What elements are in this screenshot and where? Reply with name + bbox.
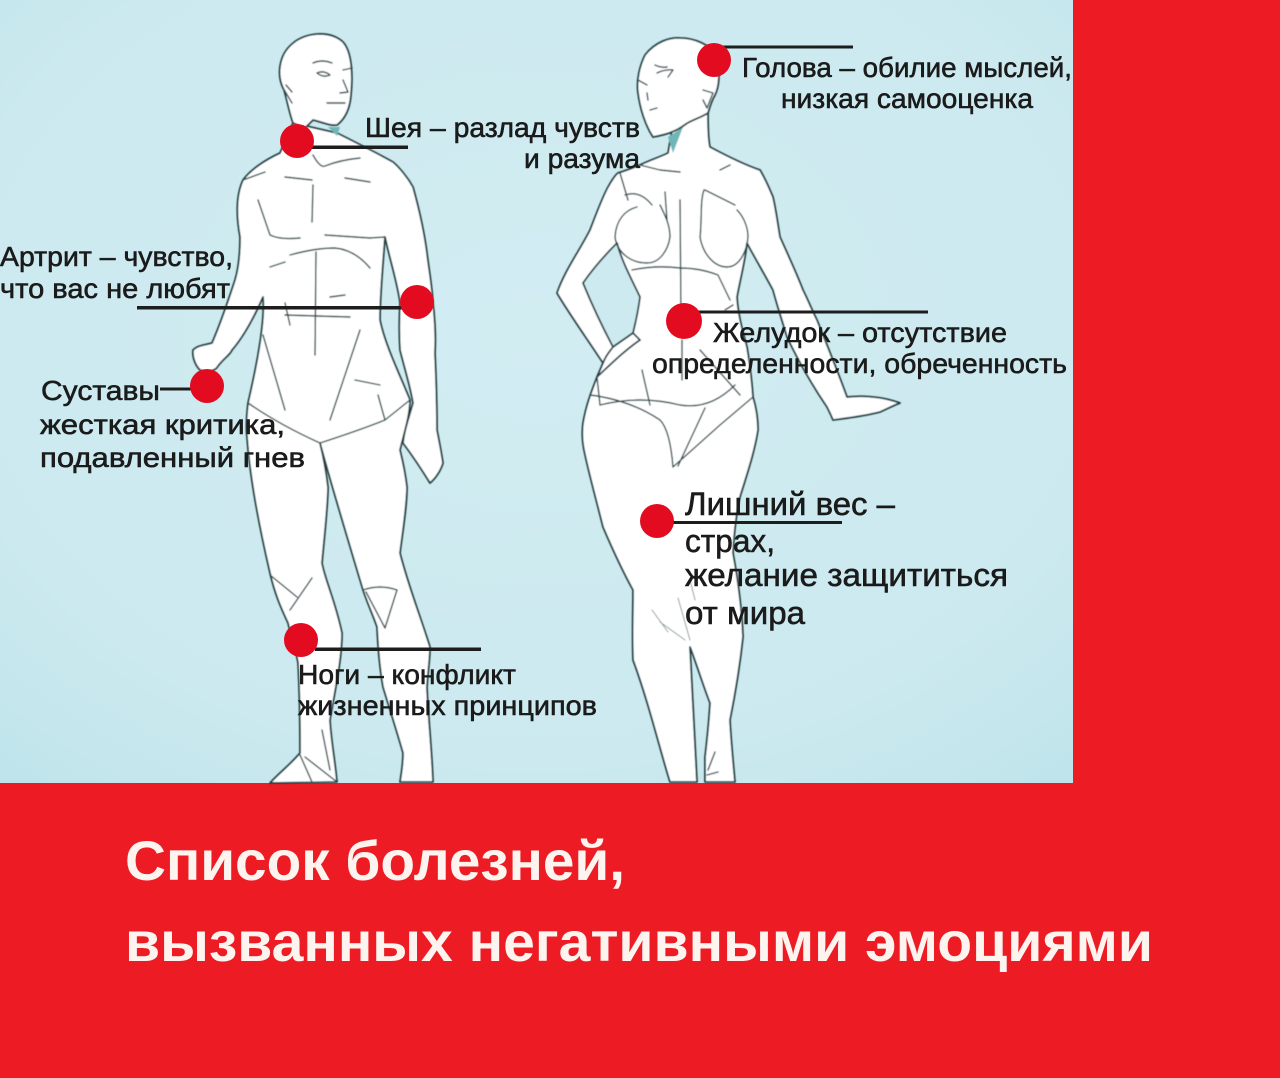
female arm gap xyxy=(583,243,640,347)
marker: head xyxy=(697,43,731,77)
text: head: Голова – обилие мыслей, xyxy=(742,52,1072,83)
marker: neck xyxy=(280,124,314,158)
marker: stomach xyxy=(666,303,702,339)
text: excess weight: страх, xyxy=(685,523,775,559)
text: stomach: Желудок – отсутствие xyxy=(713,317,1007,348)
text: head: низкая самооценка xyxy=(781,83,1033,114)
female head xyxy=(637,38,719,137)
illustration: female figure xyxy=(557,38,900,782)
illustration: male figure xyxy=(193,34,443,783)
text: legs xyxy=(298,659,597,721)
text: stomach xyxy=(652,317,1067,379)
leader line: neck xyxy=(300,146,408,149)
text: arthritis: Артрит – чувство, xyxy=(0,241,233,272)
callout: joints xyxy=(40,369,305,473)
leader line: excess weight xyxy=(672,521,842,524)
text: neck: Шея – разлад чувств xyxy=(365,112,640,143)
male knee details xyxy=(270,575,397,782)
leader line: stomach xyxy=(695,310,928,314)
text: head xyxy=(742,52,1072,114)
male face details xyxy=(283,61,352,103)
text: joints: подавленный гнев xyxy=(40,442,305,473)
text: arthritis: что вас не любят xyxy=(0,273,230,304)
text: joints: жесткая критика, xyxy=(40,409,285,440)
text: excess weight: Лишний вес – xyxy=(685,486,895,522)
female knee details xyxy=(652,580,695,640)
female torso details xyxy=(590,165,753,467)
marker: excess weight xyxy=(640,504,674,538)
leader line: joints xyxy=(160,388,195,390)
male torso details xyxy=(243,155,410,443)
marker: legs xyxy=(284,623,318,657)
callout: stomach xyxy=(652,303,1067,379)
text: joints: Суставы xyxy=(41,375,160,406)
text: neck: и разума xyxy=(524,143,640,174)
female body outline xyxy=(557,113,900,782)
text: joints xyxy=(40,375,305,473)
title: Список болезней, xyxy=(125,829,625,892)
callout: excess weight xyxy=(640,486,1008,631)
text: stomach: определенности, обреченность xyxy=(652,348,1067,379)
text: legs: жизненных принципов xyxy=(298,690,597,721)
leader line: arthritis xyxy=(137,306,417,310)
male neck shadow xyxy=(328,127,340,136)
callout: legs xyxy=(284,623,597,721)
title: вызванных негативными эмоциями xyxy=(125,910,1153,973)
title xyxy=(125,829,1153,973)
female hand on hip xyxy=(597,333,640,377)
female neck shadow xyxy=(668,127,683,153)
leader line: legs xyxy=(315,648,481,651)
text: excess weight xyxy=(685,486,1008,631)
callout: neck xyxy=(280,112,640,174)
leader line: head xyxy=(722,46,853,48)
marker: joints xyxy=(190,369,224,403)
male body outline xyxy=(193,123,443,783)
marker: arthritis xyxy=(400,285,434,319)
panel: light blue illustration area xyxy=(0,0,1073,783)
male head xyxy=(280,34,352,128)
text: excess weight: от мира xyxy=(685,595,805,631)
callout: head xyxy=(697,43,1072,114)
text: legs: Ноги – конфликт xyxy=(298,659,516,690)
female face details xyxy=(638,65,713,110)
text: excess weight: желание защититься xyxy=(685,557,1008,593)
text: neck xyxy=(365,112,640,174)
callout: arthritis xyxy=(0,241,434,319)
text: arthritis xyxy=(0,241,233,304)
